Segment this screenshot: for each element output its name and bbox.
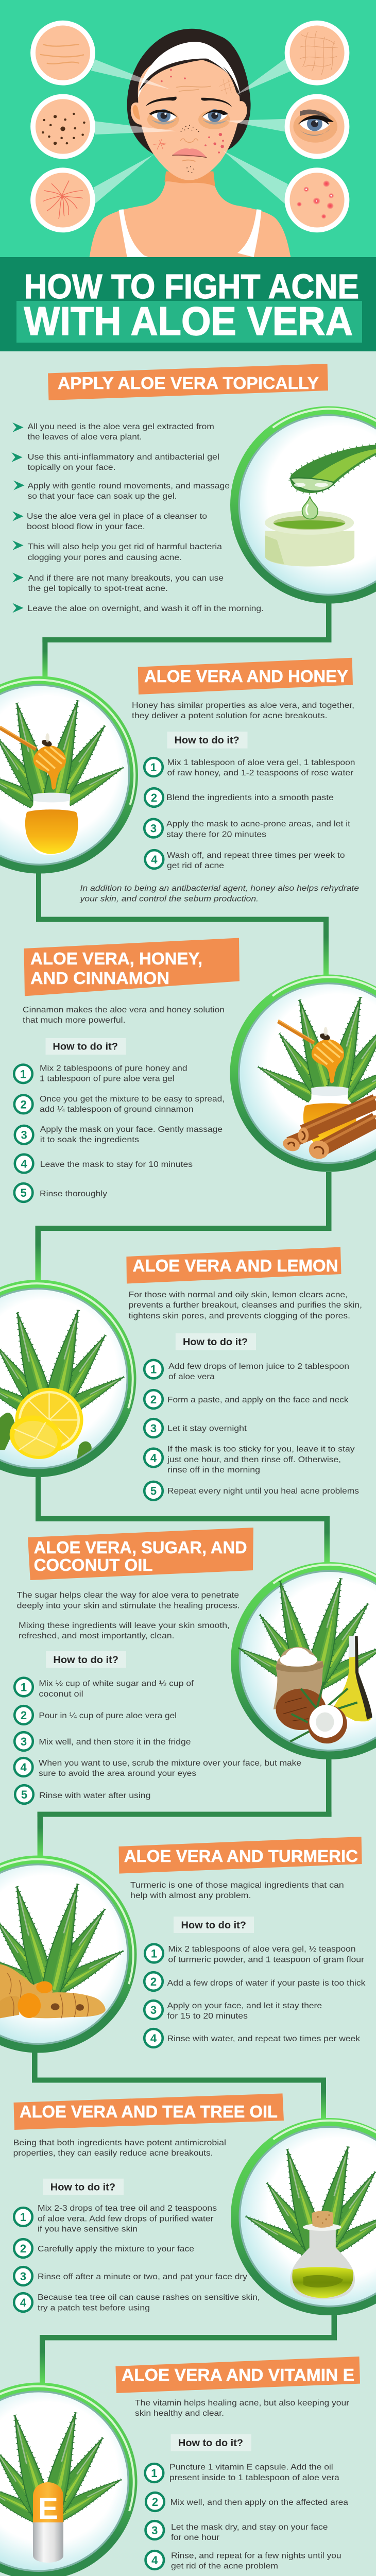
heading: cinnamon: ALOE VERA, HONEY, [30,950,202,969]
step 4: try a patch test before using [38,2304,150,2313]
step 3 [15,1125,223,1144]
step 4: sure to avoid the area around your eyes [39,1769,196,1778]
step 4: rinse off in the morning [167,1466,260,1475]
closing note: your skin, and control the sebum production. [79,894,259,904]
intro text: tightens skin pores, and prevents clogging of the pores. [129,1312,350,1320]
step 1: 1 [151,2467,158,2480]
step 3: for 15 to 20 minutes [167,2012,248,2021]
intro text [17,1591,240,1640]
step 3: Apply on your face, and let it stay there [167,2002,322,2010]
title [0,257,376,351]
step 2: Pour in ¼ cup of pure aloe vera gel [39,1711,177,1720]
circle: aloe plant with lemon [0,1280,136,1477]
intro text: deeply into your skin and stimulate the healing process. [17,1601,240,1610]
bullet list text: boost blood flow in your face. [27,522,145,531]
panel: apply aloe vera topically [11,364,376,613]
circle: aloe plant with honey and cinnamon sticks [230,975,376,1172]
step 3 [14,1732,191,1751]
step 2: Form a paste, and apply on the face and neck [167,1396,349,1404]
step 4: get rid of the acne problem [171,2562,278,2571]
step 1: Add few drops of lemon juice to 2 tablespoon [168,1362,349,1371]
circle: dark under-eye [285,94,349,159]
step 3: Mix well, and then store it in the fridge [39,1738,191,1747]
panel: aloe vera and lemon [0,1247,362,1500]
step 4 [144,2029,361,2047]
bullet list text: This will also help you get rid of harmful bacteria [28,543,222,551]
step 2: Blend the ingredients into a smooth paste [166,793,334,802]
panel: aloe vera and turmeric [0,1837,366,2053]
step 2 [14,1706,177,1724]
step 1 [144,1360,349,1381]
step 4 [145,2551,341,2571]
step 5: Rinse with water after using [39,1791,150,1800]
step 3 [14,2267,247,2285]
step 2: 2 [150,1393,157,1406]
step 1: 1 [20,1067,26,1080]
step 3: 3 [150,822,157,835]
step 1: Mix 2 tablespoons of pure honey and [40,1064,187,1073]
step 1: coconut oil [39,1690,83,1699]
step 1: Mix 2-3 drops of tea tree oil and 2 teaspoons [38,2204,217,2213]
step 3 [144,819,351,839]
woman with skin problems [90,29,290,257]
bullet list text: topically on your face. [28,463,115,472]
step 1 [14,1064,187,1083]
bullet list text: Leave the aloe on overnight, and wash it off in the morning. [28,604,264,613]
title: WITH ALOE VERA [24,298,353,344]
bullet list text: the gel topically to spot-treat acne. [28,584,168,593]
step 1: Mix ½ cup of white sugar and ½ cup of [39,1680,194,1688]
step 2 [144,1390,349,1409]
step 3: Let it stay overnight [167,1425,247,1433]
step 3 [144,1419,247,1437]
bullet list text [27,422,264,613]
intro text: Honey has similar properties as aloe vera, and together, [132,701,354,710]
step 2: 2 [150,1975,157,1988]
step 1: Mix 2 tablespoons of aloe vera gel, ½ teaspoon [168,1945,355,1954]
step 4: Leave the mask to stay for 10 minutes [40,1160,193,1169]
bullet list text: so that your face can soak up the gel. [28,492,177,501]
step 4: 4 [150,2032,157,2045]
step 4: just one hour, and then rinse off. Otherwise, [167,1455,341,1464]
how to do it label: How to do it? [181,1920,246,1931]
step 4: Rinse, and repeat for a few nights until you [171,2551,341,2561]
heading: apply topically [48,364,328,400]
bullet list text: clogging your pores and causing acne. [28,553,182,562]
intro text: refreshed, and most importantly, clean. [19,1632,174,1640]
step 3: Let the mask dry, and stay on your face [171,2523,328,2532]
step 4 [14,1758,301,1778]
step 2: 2 [20,2242,26,2255]
circle: aloe plant with vitamin e capsule: E [38,2492,58,2526]
circle: forehead wrinkles [30,21,95,86]
panel: aloe vera, honey and cinnamon [14,938,376,1202]
step 5 [15,1785,150,1804]
step 1 [14,1678,194,1699]
intro text [130,1881,344,1900]
bullet list text: Use this anti-inflammatory and antibacterial gel [28,453,219,462]
closing note [79,884,359,904]
heading: lemon [126,1247,341,1284]
step 3: 3 [150,2004,157,2016]
bullet list text: Use the aloe vera gel in place of a cleanser to [27,512,207,521]
step 2: 2 [152,2496,158,2509]
step 4: Because tea tree oil can cause rashes on sensitive skin, [38,2293,260,2302]
step 2: Add a few drops of water if your paste is too thick [167,1979,366,1988]
bullet arrows [11,422,25,613]
circle: broken capillaries [30,167,95,232]
how to do it label [176,1333,256,1350]
intro text [132,701,354,720]
step 1: 1 [20,2211,26,2224]
heading: lemon: ALOE VERA AND LEMON [133,1257,338,1276]
step 3: Apply the mask to acne-prone areas, and let it [166,820,351,828]
step 2: add ¼ tablespoon of ground cinnamon [40,1105,194,1114]
step 3: for one hour [171,2533,220,2542]
heading: vitamin e [115,2357,360,2393]
intro text: The sugar helps clear the way for aloe vera to penetrate [17,1591,239,1600]
circle: crepey skin [285,21,349,86]
step 5 [144,1482,359,1500]
heading: coconut: COCONUT OIL [34,1556,153,1575]
step 3: Apply the mask on your face. Gently massage [40,1125,223,1134]
how to do it label [174,1917,254,1933]
circle: aloe leaf dripping gel into jar [230,406,376,604]
step 1 [144,758,355,777]
step 2 [14,1095,225,1114]
heading: cinnamon [24,938,240,996]
step 2: 2 [21,1709,27,1722]
step 2 [146,2493,348,2511]
intro text: properties, they can easily reduce acne breakouts. [13,2149,213,2158]
step 2: Mix well, and then apply on the affected area [170,2498,348,2507]
step 3: Rinse off after a minute or two, and pat your face dry [38,2273,247,2281]
step 4: 4 [151,853,158,866]
how to do it label [167,732,247,749]
step 1: of raw honey, and 1-2 teaspoons of rose water [167,769,354,777]
intro text [23,1006,225,1025]
panel: aloe vera and honey [0,658,359,904]
panel: aloe vera, sugar and coconut oil [14,1528,376,1804]
step 1: 1 [21,1681,27,1694]
intro text: that much more powerful. [23,1016,125,1025]
heading: turmeric: ALOE VERA AND TURMERIC [124,1847,358,1866]
step 1: of turmeric powder, and 1 teaspoon of gram flour [168,1956,365,1964]
bullet list text: the leaves of aloe vera plant. [28,433,142,442]
step 4: 4 [20,2296,27,2309]
bullet list text: And if there are not many breakouts, you can use [28,574,224,583]
how to do it label: How to do it? [53,1041,118,1052]
step 1: present inside to 1 tablespoon of aloe vera [169,2473,339,2482]
step 5: Repeat every night until you heal acne problems [167,1487,359,1496]
step 1 [145,2463,339,2482]
step 1: of aloe vera. Add few drops of purified water [38,2214,214,2223]
intro text: they deliver a potent solution for acne breakouts. [132,711,328,720]
how to do it label [43,2179,124,2195]
circle: pimples [285,167,349,232]
intro text: Cinnamon makes the aloe vera and honey solution [23,1006,225,1014]
step 3: 3 [21,1129,27,1142]
step 2 [144,1972,366,1991]
heading: apply topically: APPLY ALOE VERA TOPICALLY [58,374,319,393]
panel: aloe vera and vitamin e [0,2357,360,2576]
bullet list text: All you need is the aloe vera gel extracted from [28,422,214,431]
step 3: stay there for 20 minutes [166,831,266,839]
step 4: If the mask is too sticky for you, leave it to stay [167,1445,355,1453]
step 1: Mix 1 tablespoon of aloe vera gel, 1 tablespoon [167,758,355,767]
step 2: 2 [20,1098,27,1111]
how to do it label: How to do it? [53,1654,118,1666]
step 2: Once you get the mixture to be easy to spread, [40,1095,225,1104]
step 1: 1 [151,1947,157,1960]
step 5: 5 [21,1788,27,1801]
callout beams [91,59,290,204]
step 2: 2 [151,791,157,804]
heading: coconut: ALOE VERA, SUGAR, AND [34,1538,247,1557]
heading: honey: ALOE VERA AND HONEY [144,667,348,686]
how to do it label: How to do it? [183,1336,248,1348]
heading: vitamin e: ALOE VERA AND VITAMIN E [122,2366,354,2385]
closing note: In addition to being an antibacterial agent, honey also helps rehydrate [80,884,359,893]
heading: coconut [28,1528,253,1580]
step 1: Puncture 1 vitamin E capsule. Add the oil [169,2463,333,2472]
step 3: it to soak the ingredients [40,1136,139,1144]
step 5: 5 [150,1485,157,1498]
step 4: 4 [20,1761,27,1774]
step 5 [14,1183,107,1202]
step 3 [144,2001,322,2021]
how to do it label: How to do it? [50,2182,115,2193]
circle: aloe plant with oil flask [231,2118,376,2315]
intro text [135,2399,350,2418]
step 4: get rid of acne [167,861,224,870]
heading: tea tree oil: ALOE VERA AND TEA TREE OIL [20,2103,278,2122]
step 5: Rinse thoroughly [40,1190,107,1198]
step 5: 5 [20,1187,27,1199]
how to do it label [171,2434,251,2451]
how to do it label: How to do it? [174,735,240,746]
heading: tea tree oil [13,2093,284,2130]
step 2 [14,2239,194,2258]
step 4: When you want to use, scrub the mixture over your face, but make [39,1759,301,1768]
circle: aloe plant with sugar sack, coconut and oil [231,1562,376,1759]
step 4 [145,850,345,870]
step 1 [14,2204,217,2234]
step 1: 1 [150,761,157,774]
step 3: 3 [21,1735,27,1748]
how to do it label [46,1651,126,1668]
step 4 [144,1445,355,1475]
panel: aloe vera and tea tree oil [13,2093,376,2315]
step 3: 3 [20,2270,26,2283]
circle: aloe plant with turmeric roots [0,1856,137,2053]
step 3: 3 [151,2524,158,2537]
intro text: The vitamin helps healing acne, but also keeping your [135,2399,350,2408]
connectors between sections [32,603,337,2576]
header illustration [0,0,376,257]
intro text: Turmeric is one of those magical ingredients that can [130,1881,344,1890]
step 3 [145,2521,328,2542]
step 1: of aloe vera [168,1372,215,1381]
step 2: Carefully apply the mixture to your face [38,2245,194,2253]
step 4: 4 [151,2554,158,2567]
step 4: 4 [150,1452,157,1464]
circle: aloe plant with vitamin e capsule [0,2382,137,2576]
intro text: For those with normal and oily skin, lemon clears acne, [129,1291,348,1299]
heading: honey [138,658,353,694]
how to do it label: How to do it? [178,2437,243,2449]
step 4: 4 [21,1157,27,1171]
step 4 [15,1155,193,1173]
step 4: Rinse with water, and repeat two times per week [167,2035,361,2043]
bullet list text: Apply with gentle round movements, and massage [28,482,230,490]
step 3: 3 [150,1422,157,1435]
step 1 [145,1944,365,1964]
intro text [13,2139,226,2158]
circle: aloe plant with honey jar [0,676,138,874]
step 2 [145,788,334,807]
title: HOW TO FIGHT ACNE [24,267,359,306]
intro text: skin healthy and clear. [135,2409,224,2418]
intro text: Mixing these ingredients will leave your skin smooth, [19,1621,230,1630]
step 1: if you have sensitive skin [38,2225,138,2234]
step 4 [14,2293,260,2313]
step 4: Wash off, and repeat three times per week to [167,851,345,860]
how to do it label [45,1038,126,1055]
circle: blackheads [30,94,95,159]
intro text: help with almost any problem. [130,1891,251,1900]
heading: turmeric [118,1837,362,1874]
heading: cinnamon: AND CINNAMON [30,969,169,988]
intro text [129,1291,362,1320]
step 1: 1 [150,1363,157,1376]
intro text: prevents a further breakout, cleanses and purifies the skin, [129,1301,362,1310]
step 1: 1 tablespoon of pure aloe vera gel [40,1075,174,1083]
intro text: Being that both ingredients have potent antimicrobial [13,2139,226,2147]
